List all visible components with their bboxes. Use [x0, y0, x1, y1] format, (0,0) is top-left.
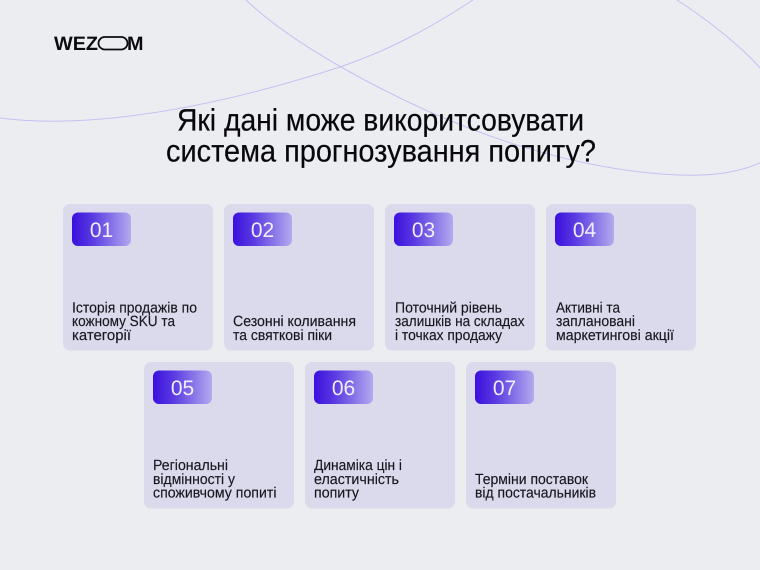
- badge: 05: [153, 370, 212, 404]
- text: card 05 description: [153, 458, 276, 502]
- title: Які дані може викоритсовувати: [177, 102, 584, 138]
- text: card 05 description: споживчому попиті: [153, 486, 276, 502]
- text: card 07 description: Терміни поставок: [475, 472, 588, 488]
- panel: card 02: [224, 204, 374, 350]
- panel: card 06: [305, 362, 455, 508]
- text: card 02 description: та святкові піки: [233, 328, 332, 344]
- logo: WEZOM: [54, 33, 144, 55]
- text: card 04 description: маркетингові акції: [556, 328, 674, 344]
- badge: 06: [314, 370, 373, 404]
- text: card 03 description: і точках продажу: [395, 328, 503, 344]
- text: card 01 description: категорії: [72, 328, 131, 344]
- badge: 04: 04: [573, 219, 596, 242]
- text: card 03 description: залишків на складах: [395, 314, 525, 330]
- text: card 07 description: [475, 472, 596, 502]
- text: card 05 description: Регіональні: [153, 458, 228, 474]
- badge: 07: 07: [493, 377, 516, 400]
- text: card 05 description: відмінності у: [153, 472, 236, 488]
- badge: 01: [72, 212, 131, 246]
- badge: 03: 03: [412, 219, 435, 242]
- panel: card 01: [63, 204, 213, 350]
- badge: 02: [233, 212, 292, 246]
- badge: 07: [475, 370, 534, 404]
- badge: 02: 02: [251, 219, 274, 242]
- text: card 06 description: попиту: [314, 486, 360, 502]
- title: [166, 102, 596, 168]
- badge: 06: 06: [332, 377, 355, 400]
- text: card 04 description: заплановані: [556, 314, 635, 330]
- text: card 02 description: [233, 314, 356, 344]
- text: card 02 description: Сезонні коливання: [233, 314, 356, 330]
- panel: card 07: [466, 362, 616, 508]
- title: система прогнозування попиту?: [166, 134, 596, 168]
- text: card 06 description: еластичність: [314, 472, 399, 488]
- badge: 05: 05: [171, 377, 194, 400]
- panel: card 04: [546, 204, 696, 350]
- text: card 01 description: кожному SKU та: [72, 314, 176, 330]
- text: card 04 description: Активні та: [556, 300, 621, 316]
- text: card 01 description: [72, 300, 197, 344]
- text: card 03 description: [395, 300, 525, 344]
- text: card 06 description: [314, 458, 402, 502]
- text: card 06 description: Динаміка цін і: [314, 458, 402, 474]
- text: card 07 description: від постачальників: [475, 486, 596, 502]
- text: card 01 description: Історія продажів по: [72, 300, 197, 316]
- text: card 03 description: Поточний рівень: [395, 300, 502, 316]
- logo: WEZOM: M: [127, 33, 144, 55]
- badge: 01: 01: [90, 219, 113, 242]
- badge: 04: [555, 212, 614, 246]
- panel: card 03: [385, 204, 535, 350]
- badge: 03: [394, 212, 453, 246]
- panel: card 05: [144, 362, 294, 508]
- text: card 04 description: [556, 300, 674, 344]
- logo: WEZOM: WEZ: [54, 33, 98, 55]
